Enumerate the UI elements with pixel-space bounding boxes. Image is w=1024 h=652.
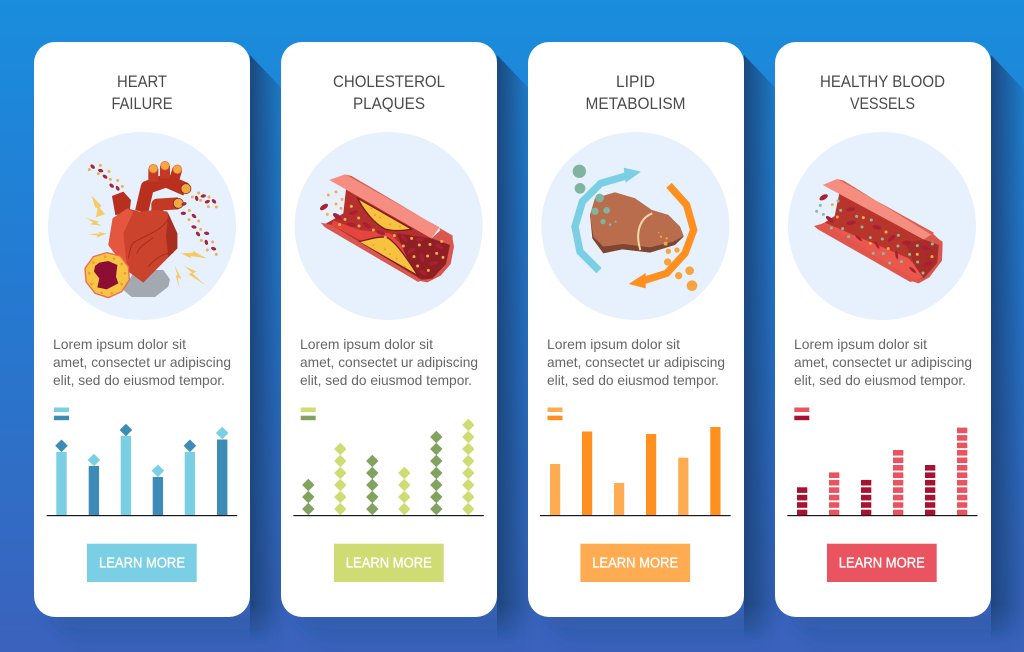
- description text: Lorem ipsum dolor sit: [300, 336, 433, 352]
- description text: [547, 336, 725, 388]
- arrow: blue cycle: [575, 168, 641, 271]
- description text: amet, consectet ur adipiscing: [300, 354, 478, 370]
- panel: lipid metabolism: [528, 42, 744, 617]
- description text: elit, sed do eiusmod tempor.: [300, 372, 472, 388]
- description text: amet, consectet ur adipiscing: [794, 354, 972, 370]
- button: learn more: [827, 544, 937, 582]
- panel: cholesterol plaques: [281, 42, 497, 617]
- illustration: artery with plaques: [295, 132, 483, 320]
- description text: Lorem ipsum dolor sit: [794, 336, 927, 352]
- heading: healthy blood vessels: HEALTHY BLOOD: [820, 72, 945, 91]
- panel: healthy blood vessels: [775, 42, 991, 617]
- description text: Lorem ipsum dolor sit: [53, 336, 186, 352]
- description text: [794, 336, 972, 388]
- heading: healthy blood vessels: VESSELS: [850, 94, 915, 113]
- heading: heart failure: FAILURE: [112, 94, 172, 113]
- legend: [794, 408, 809, 420]
- button: learn more: LEARN MORE: [346, 555, 432, 572]
- button: learn more: [334, 544, 444, 582]
- diamond stack chart: [293, 419, 484, 516]
- button: learn more: LEARN MORE: [592, 555, 678, 572]
- description text: amet, consectet ur adipiscing: [547, 354, 725, 370]
- heading: cholesterol plaques: PLAQUES: [353, 94, 425, 113]
- button: learn more: [580, 544, 690, 582]
- description text: elit, sed do eiusmod tempor.: [794, 372, 966, 388]
- description text: [300, 336, 478, 388]
- description text: elit, sed do eiusmod tempor.: [53, 372, 225, 388]
- description text: elit, sed do eiusmod tempor.: [547, 372, 719, 388]
- button: learn more: [87, 544, 197, 582]
- heading: lipid metabolism: METABOLISM: [586, 94, 686, 113]
- description text: amet, consectet ur adipiscing: [53, 354, 231, 370]
- heading: lipid metabolism: LIPID: [616, 72, 655, 91]
- legend: [548, 408, 562, 420]
- legend: [54, 408, 69, 420]
- bar chart: [540, 427, 731, 516]
- heading: heart failure: HEART: [117, 72, 167, 91]
- illustration: liver with metabolism arrows: [541, 132, 729, 320]
- heading: healthy blood vessels: [820, 72, 945, 113]
- heading: lipid metabolism: [586, 72, 686, 113]
- heading: heart failure: [112, 72, 172, 113]
- panel: heart failure: [34, 42, 250, 617]
- heading: cholesterol plaques: CHOLESTEROL: [333, 72, 445, 91]
- illustration: heart: [48, 132, 236, 320]
- segmented bar chart: [787, 428, 978, 516]
- illustration: healthy vessel: [788, 132, 976, 320]
- legend: [301, 408, 316, 420]
- button: learn more: LEARN MORE: [839, 555, 925, 572]
- heading: cholesterol plaques: [333, 72, 445, 113]
- button: learn more: LEARN MORE: [99, 555, 185, 572]
- arrow: orange cycle: [629, 185, 694, 288]
- description text: [53, 336, 231, 388]
- bar chart with diamonds: [47, 424, 237, 516]
- description text: Lorem ipsum dolor sit: [547, 336, 680, 352]
